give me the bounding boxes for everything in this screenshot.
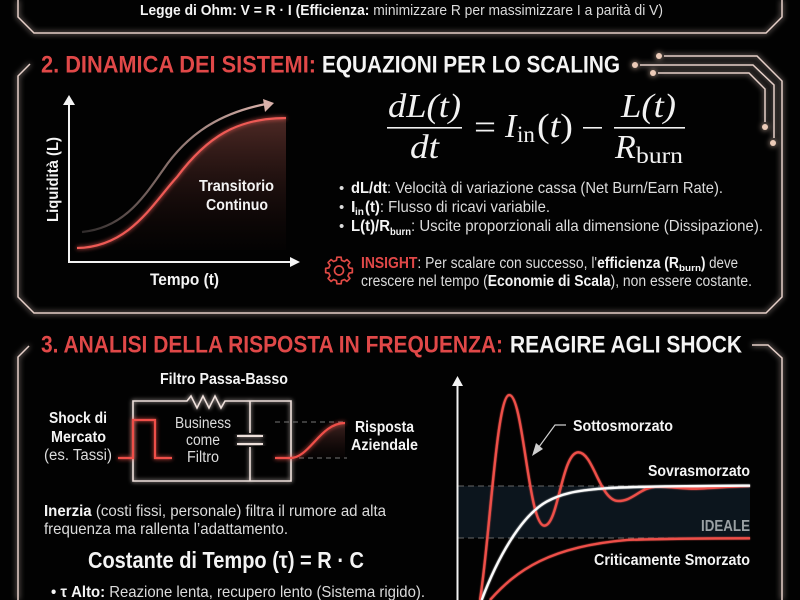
callout: insight (361, 255, 752, 290)
formula: time constant: Costante di Tempo (τ) = R · C (88, 547, 364, 573)
diagram: low-pass filter circuit: Mercato (51, 429, 106, 446)
diagram: low-pass filter circuit: Filtro (187, 449, 219, 466)
chart: step response: Criticamente Smorzato (594, 552, 750, 569)
chart: liquidity over time: Continuo (206, 197, 268, 214)
diagram: low-pass filter circuit: come (186, 432, 220, 449)
formula: liquidity differential equation: dt (410, 129, 441, 166)
list: equation terms (339, 180, 763, 238)
list: equation terms: I (351, 199, 355, 216)
list: equation terms: dL/dt: Velocità di variazione cassa (Net Burn/Earn Rate). (351, 180, 723, 197)
text: inertia (44, 503, 386, 538)
list: equation terms: burn (390, 227, 411, 238)
formula: liquidity differential equation: dL(t) (388, 88, 461, 125)
text: inertia: frequenza ma rallenta l’adattamento. (44, 521, 288, 538)
formula: liquidity differential equation: burn (636, 143, 684, 168)
formula: liquidity differential equation: L(t) (620, 88, 676, 125)
callout: insight: ) deve (701, 255, 738, 272)
panel 2: frame with circuit traces (18, 53, 782, 313)
list: equation terms: L(t)/R (351, 218, 390, 235)
diagram: low-pass filter circuit (44, 371, 418, 481)
list: equation terms: • (339, 199, 344, 216)
formula: liquidity differential equation: = (474, 107, 496, 147)
diagram: low-pass filter circuit: Aziendale (351, 437, 418, 454)
diagram: low-pass filter circuit: Shock di (49, 410, 107, 427)
heading: section 2 (41, 52, 620, 78)
heading: section 2: 2. DINAMICA DEI SISTEMI: (41, 52, 316, 78)
chart: liquidity over time: Transitorio (199, 178, 274, 195)
list: equation terms: : Uscite proporzionali alla dimensione (Dissipazione). (411, 218, 763, 235)
formula: liquidity differential equation: in (517, 122, 535, 147)
callout: insight: crescere nel tempo (Economie di Scala), non essere costante. (361, 273, 752, 290)
callout: insight: INSIGHT: Per scalare con successo, l'efficienza (R (361, 255, 679, 272)
chart: liquidity over time: Liquidità (L) (45, 137, 62, 222)
diagram: low-pass filter circuit: Business (175, 415, 231, 432)
diagram: low-pass filter circuit: Risposta (355, 419, 414, 436)
panel 1: bottom frame (18, 0, 782, 33)
heading: section 3: 3. ANALISI DELLA RISPOSTA IN FREQUENZA: (41, 332, 503, 358)
chart: step response: Sovrasmorzato (648, 463, 750, 480)
callout: insight: burn (679, 263, 701, 274)
formula: liquidity differential equation: R (614, 129, 636, 166)
chart: liquidity over time: Tempo (t) (150, 271, 219, 289)
panel 3: frame (18, 345, 782, 600)
diagram: low-pass filter circuit: (es. Tassi) (44, 447, 112, 464)
icon: gear (326, 257, 352, 284)
list: equation terms: • (339, 218, 344, 235)
formula: liquidity differential equation: (t) (537, 108, 573, 145)
formula: liquidity differential equation (387, 88, 685, 168)
heading: section 3: REAGIRE AGLI SHOCK (510, 332, 743, 358)
chart: step response (452, 376, 750, 600)
text: inertia: Inerzia (costi fissi, personale) filtra il rumore ad alta (44, 503, 386, 520)
list: equation terms: (t): Flusso di ricavi variabile. (365, 199, 550, 216)
chart: step response: Sottosmorzato (573, 418, 673, 435)
heading: section 2: EQUAZIONI PER LO SCALING (322, 52, 620, 78)
chart: liquidity over time (45, 95, 300, 289)
diagram: low-pass filter circuit: Filtro Passa-Basso (160, 371, 288, 388)
list: equation terms: in (355, 207, 364, 218)
list: equation terms: • (339, 180, 344, 197)
chart: step response: IDEALE (701, 518, 750, 535)
formula: liquidity differential equation: I (504, 108, 518, 145)
text: Ohm's law: Legge di Ohm: V = R · I (Efficienza: minimizzare R per massimizzare I a parità di V) (140, 2, 663, 19)
